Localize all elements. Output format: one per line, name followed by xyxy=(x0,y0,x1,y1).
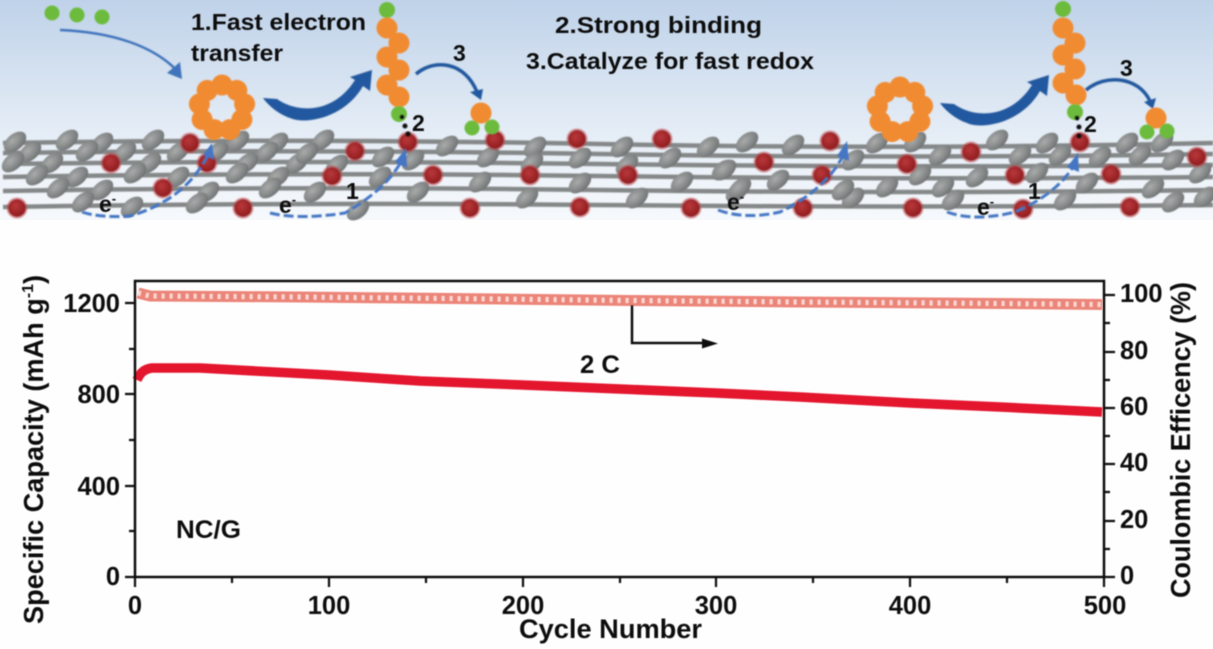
step numbers: 2 xyxy=(1084,111,1097,137)
schematic labels xyxy=(99,9,1133,220)
x axis tick labels: 200 xyxy=(502,592,544,620)
rate label: 2 C xyxy=(580,351,620,379)
icon: small product left xyxy=(464,102,500,136)
left axis title: ) xyxy=(18,275,49,284)
icon: binding dots left xyxy=(400,114,410,136)
step numbers: 1 xyxy=(346,178,359,204)
step numbers: 3 xyxy=(453,40,466,66)
icon: orange ring right xyxy=(867,76,933,142)
right axis tick labels: 20 xyxy=(1120,506,1148,534)
x axis tick labels: 0 xyxy=(128,592,142,620)
icon: binding dots right xyxy=(1074,116,1082,138)
graphene sheet xyxy=(0,126,1213,224)
heading: fast electron transfer: 1.Fast electron xyxy=(191,9,366,35)
left axis tick labels: 0 xyxy=(106,563,120,591)
arrow: left swoosh xyxy=(263,70,372,120)
icon: three green sulfur atoms xyxy=(44,6,110,24)
x axis tick labels: 400 xyxy=(889,592,931,620)
panel: cycling performance chart xyxy=(18,275,1196,644)
sample label: NC/G xyxy=(176,516,241,544)
heading line 2: transfer: transfer xyxy=(191,40,283,66)
arrow: right swoosh xyxy=(940,75,1049,125)
electron labels: - xyxy=(740,189,744,204)
molecules and arrows xyxy=(44,1,1174,217)
heading: catalyze: 3.Catalyze for fast redox xyxy=(526,48,814,74)
panel: reaction mechanism schematic xyxy=(0,0,1213,224)
right axis tick labels: 40 xyxy=(1120,449,1148,477)
step numbers xyxy=(346,40,1133,204)
heading: strong binding: 2.Strong binding xyxy=(555,12,762,38)
step numbers: 1 xyxy=(1028,178,1041,204)
electron labels: e xyxy=(977,194,990,220)
arrow: step 3 left xyxy=(416,65,483,100)
electron labels: e xyxy=(279,192,292,218)
right axis tick labels: 60 xyxy=(1120,393,1148,421)
x axis title: Cycle Number xyxy=(519,614,702,644)
left axis tick labels xyxy=(63,290,120,591)
arrow: electron path 3 xyxy=(718,141,849,216)
step numbers: 3 xyxy=(1120,55,1133,81)
sky background xyxy=(0,0,1213,220)
left axis tick labels: 800 xyxy=(77,381,120,409)
electron labels: - xyxy=(990,194,994,209)
arrow: electron path 1 xyxy=(82,143,214,216)
series: coulombic efficiency xyxy=(138,293,1102,304)
right axis tick labels: 100 xyxy=(1120,280,1163,308)
left axis tick labels: 1200 xyxy=(63,290,120,318)
left axis title: -1 xyxy=(20,284,37,298)
step numbers: 2 xyxy=(412,110,425,136)
right axis title: Coulombic Efficency (%) xyxy=(1165,282,1196,598)
left axis tick labels: 400 xyxy=(77,473,120,501)
electron labels: - xyxy=(292,192,296,207)
x axis tick labels xyxy=(128,592,1126,620)
arrow: electron path 2 xyxy=(270,148,407,216)
x axis tick labels: 300 xyxy=(695,592,737,620)
series: specific capacity xyxy=(137,368,1102,412)
icon: right chain molecule xyxy=(1052,1,1086,120)
x axis tick labels: 100 xyxy=(308,592,350,620)
electron labels xyxy=(99,189,994,220)
plot frame xyxy=(135,281,1104,577)
icon: orange ring left xyxy=(189,74,255,140)
axis ticks xyxy=(125,295,1115,587)
arrow: incoming curve xyxy=(60,30,182,79)
arrow: electron path 4 xyxy=(947,153,1079,217)
right axis tick labels xyxy=(1120,280,1163,590)
left axis title: Specific Capacity (mAh g xyxy=(18,294,49,624)
right axis tick labels: 0 xyxy=(1120,562,1134,590)
arrow: points to right axis xyxy=(632,305,718,348)
electron labels: e xyxy=(99,191,112,217)
arrow: step 3 right xyxy=(1086,80,1156,109)
electron labels: - xyxy=(112,191,116,206)
x axis tick labels: 500 xyxy=(1084,592,1126,620)
electron labels: e xyxy=(727,189,740,215)
icon: small product right xyxy=(1140,108,1174,140)
icon: left chain molecule xyxy=(376,2,410,122)
right axis tick labels: 80 xyxy=(1120,337,1148,365)
